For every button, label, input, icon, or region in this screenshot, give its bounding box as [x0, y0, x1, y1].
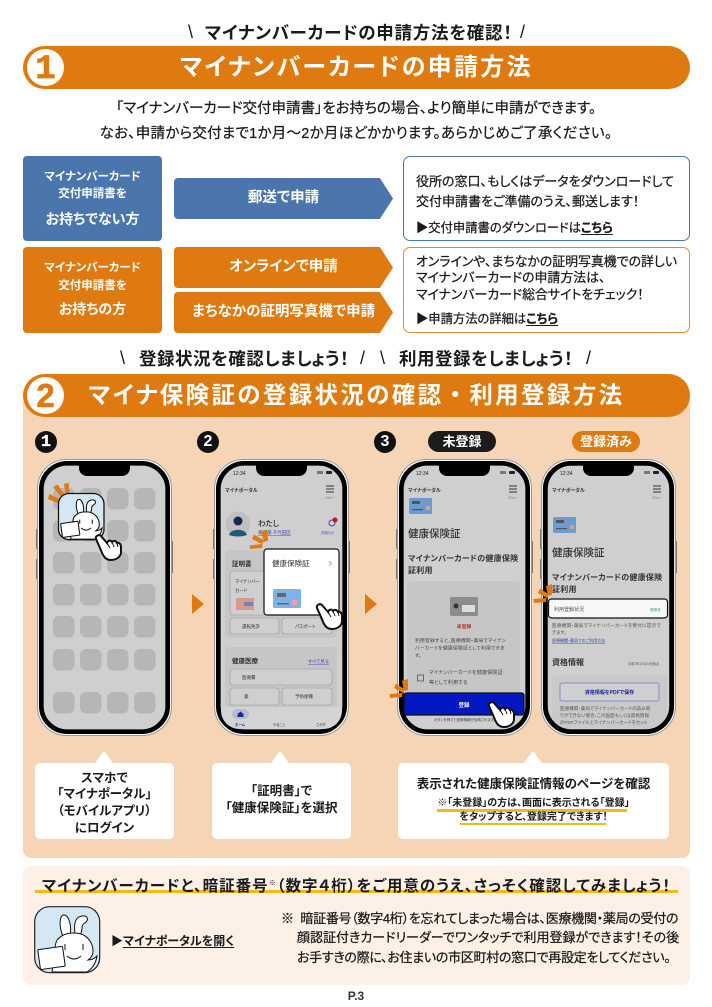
phone 4: registered screen: 令和7年10月24日時点 [628, 661, 660, 666]
box: online application details: ▶申請方法の詳細はこちら [416, 312, 558, 326]
registration status row: 登録済 [650, 607, 661, 612]
phone 3: not registered screen: マイナンバーカードの健康保険 [408, 553, 518, 563]
callout: step 3: 表示された健康保険証情報のページを確認 [417, 777, 650, 791]
step number 1 [35, 431, 57, 453]
box: mail application details: 役所の窓口、もしくはデータをダウンロードして [416, 174, 674, 188]
phone 2: portal home screen: 12:34 [233, 471, 246, 477]
phone 3: not registered screen: バーカードを健康保険証として利用できま [415, 644, 505, 652]
phone 4: registered screen [534, 459, 677, 736]
box: online application details: マイナンバーカードの申請方法は、 [416, 270, 605, 285]
phone 2: portal home screen: すべて見る [308, 658, 329, 665]
section 2 title bar [23, 374, 690, 417]
phone 4: registered screen: 証利用 [552, 584, 577, 594]
icon: pointing hand [489, 702, 514, 727]
phone 4: registered screen: のPDFファイルとマイナンバーカードをセット [560, 719, 648, 726]
box: no application form [23, 156, 162, 241]
phone 2: portal home screen: 医療費 [242, 674, 256, 681]
callout: step 2: 「健康保険証」を選択 [226, 800, 338, 814]
box: mail application details: ▶交付申請書のダウンロードはこちら [416, 220, 613, 234]
phone 4: registered screen: メニュー [652, 496, 662, 499]
tag: registered: 登録済み [580, 434, 632, 449]
phone 4: registered screen: 12:34 [560, 471, 573, 477]
callout: step 1: にログイン [75, 821, 134, 835]
intro text: 「マイナンバーカード交付申請書」をお持ちの場合、より簡単に申請ができます。 [116, 101, 596, 117]
number badge 1: 1 [35, 51, 56, 89]
icon: Myna portal rabbit app [34, 906, 100, 974]
arrow: apply online: オンラインで申請 [229, 259, 338, 275]
phone 3: not registered screen: 未登録 [457, 623, 471, 630]
heading: check and register [120, 348, 591, 369]
call to action heading: マイナンバーカードと、暗証番号※（数字４桁）をご用意のうえ、さっそく確認してみましょう！ [42, 878, 671, 895]
number badge 1 [27, 49, 64, 86]
heading: check and register: 利用登録をしましょう！ [399, 349, 573, 369]
callout: step 2: 「証明書」で [251, 784, 312, 798]
phone 3: not registered screen [390, 459, 533, 736]
phone 3: not registered screen: 等として利用する [429, 679, 468, 686]
box: online application details: マイナンバーカード総合サイトをチェック！ [416, 287, 644, 302]
heading: check application method: / [520, 22, 525, 42]
popup: health insurance card: 健康保険証 [272, 558, 310, 568]
phone 3: not registered screen: マイナンバーカードを健康保険証 [429, 669, 503, 676]
phone 2: portal home screen: 健康医療 [232, 656, 258, 665]
arrow: step 2 to 3 [365, 594, 377, 614]
note: forgotten PIN: お手すきの際に、お住まいの市区町村の窓口で再設定をしてください。 [297, 950, 671, 965]
note: forgotten PIN: ※ 暗証番号（数字4桁）を忘れてしまった場合は、医療機関・薬局の受付の [281, 910, 678, 926]
icon: pointing hand [96, 535, 121, 560]
note: forgotten PIN [281, 910, 679, 965]
callout: step 3: ※「未登録」の方は、画面に表示される「登録」 [437, 798, 630, 808]
phone 2: portal home screen: 予防接種 [295, 693, 313, 700]
box: mail application details: 交付申請書をご準備のうえ、郵送します！ [416, 194, 639, 208]
underline bar [35, 890, 678, 893]
step number 3 [374, 431, 396, 453]
icon: orange burst [250, 530, 268, 549]
phone 2: portal home screen: 薬 [244, 693, 249, 700]
phone 4: registered screen: きます。 [552, 629, 567, 636]
phone 2: portal home screen: お知らせ [321, 530, 335, 535]
box: online application details [403, 247, 690, 333]
phone 2: portal home screen: ホーム [235, 722, 246, 727]
box: no application form: お持ちでない方 [46, 210, 139, 226]
note: forgotten PIN: 顔認証付きカードリーダーでワンタッチで利用登録ができます！その後 [297, 930, 679, 945]
phone 4: registered screen: 資格情報 [552, 657, 584, 667]
icon: pointing hand [317, 604, 342, 629]
link: open Myna portal: ▶マイナポータルを開く [111, 934, 234, 948]
arrow: apply by mail: 郵送で申請 [248, 190, 319, 206]
phone 3: not registered screen: ボタンを押すと登録情報が反映されます [434, 717, 495, 722]
section 2 title text: マイナ保険証の登録状況の確認・利用登録方法 [89, 382, 624, 408]
heading: check and register: \ [380, 348, 385, 368]
number badge 2: 2 [36, 377, 55, 414]
phone 2: portal home screen: 東京都 千代田区 [258, 529, 291, 536]
icon: Myna portal rabbit app [58, 493, 104, 540]
icon: orange burst [48, 483, 70, 504]
phone 3: not registered screen: 利用登録すると、医療機関・薬局でマイナン [415, 637, 506, 644]
phone 3: not registered screen: マイナポータル [408, 487, 441, 494]
callout: step 1 [35, 763, 174, 839]
phone 2: portal home screen [213, 459, 350, 736]
phone 4: registered screen: 医療機関・薬局でマイナンバーカードを受付に提示で [552, 622, 661, 629]
popup: health insurance card [264, 549, 339, 615]
phone 2: portal home screen: カード [235, 588, 247, 594]
phone 4: registered screen: マイナポータル [552, 487, 585, 494]
phone 1: home screen [36, 459, 173, 736]
phone 4: registered screen: 資格情報をPDFで保存 [585, 689, 634, 696]
registration status row: 利用登録状況 [554, 606, 584, 613]
phone 2: portal home screen: マイナポータル [225, 487, 258, 494]
panel: section 2 background [23, 395, 690, 858]
callout: step 2 [212, 763, 351, 839]
step number 2: 2 [204, 433, 212, 450]
phone 2: portal home screen: さがす [316, 722, 326, 727]
phone 4: registered screen: りができない場合、この画面もしくは資格情報 [560, 712, 650, 719]
heading: check and register: / [360, 348, 365, 368]
box: no application form: 交付申請書を [58, 188, 127, 200]
arrow: step 1 to 2 [192, 594, 204, 614]
callout: step 3: をタップすると、登録完了できます！ [459, 812, 608, 823]
phone 4: registered screen: 健康保険証 [552, 546, 605, 559]
box: mail application details [403, 156, 690, 241]
phone 2: portal home screen: やること [273, 722, 286, 727]
phone 2: portal home screen: 証明書 [232, 559, 252, 568]
phone 3: not registered screen: す。 [415, 653, 422, 659]
phone 2: portal home screen: メニュー [325, 496, 335, 499]
callout: step 1: スマホで [81, 771, 128, 785]
callout: step 1: 「マイナポータル」 [57, 787, 152, 801]
box: has application form [23, 247, 162, 333]
intro text: なお、申請から交付まで1か月～2か月ほどかかります。あらかじめご了承ください。 [100, 126, 612, 142]
heading: check and register: 登録状況を確認しましょう！ [139, 349, 349, 369]
arrow: apply at photo booth: まちなかの証明写真機で申請 [192, 304, 375, 320]
number badge 2 [27, 377, 64, 414]
tag: not registered: 未登録 [442, 434, 482, 449]
phone 2: portal home screen: 運転免許 [242, 623, 260, 630]
step number 1: 1 [41, 433, 51, 452]
arrow: apply by mail [174, 178, 393, 219]
icon: orange burst [534, 584, 552, 603]
phone 4: registered screen: 医療機関・薬局でマイナンバーカードの読み取 [560, 705, 651, 712]
icon: orange burst [390, 679, 408, 698]
section 1 title text: マイナンバーカードの申請方法 [180, 54, 533, 81]
heading: check application method: \ [188, 22, 193, 42]
box: has application form: お持ちの方 [59, 300, 126, 316]
phone 2: portal home screen: パスポート [295, 623, 316, 629]
phone 4: registered screen: 医療機関・薬局でのご利用方法 [552, 637, 605, 643]
heading: check and register: \ [120, 348, 125, 368]
registration status row [548, 599, 668, 618]
phone 3: not registered screen: メニュー [508, 496, 518, 499]
phone 3: not registered screen: 健康保険証 [408, 527, 461, 540]
phone 2: portal home screen: わたし [258, 519, 279, 528]
heading: check application method: マイナンバーカードの申請方法を確認！ [205, 23, 513, 43]
tag: registered [572, 431, 640, 452]
arrow: apply at photo booth [174, 292, 393, 333]
step number 3: 3 [381, 433, 389, 450]
tag: not registered [428, 431, 496, 452]
arrow: apply online [174, 247, 393, 288]
callout: step 3 [398, 763, 669, 839]
intro text [100, 100, 612, 142]
phone 3: not registered screen: 証利用 [408, 565, 433, 575]
box: has application form: マイナンバーカード [44, 262, 141, 274]
box: no application form: マイナンバーカード [44, 170, 141, 182]
callout: step 1: （モバイルアプリ） [57, 804, 152, 818]
heading: check and register: / [586, 348, 591, 368]
phone 3: not registered screen: 12:34 [416, 471, 429, 477]
phone 2: portal home screen: マイナンバー [235, 579, 260, 585]
section 1 title bar [23, 46, 690, 89]
button: register [404, 693, 524, 715]
box: online application details: オンラインや、まちなかの証明写真機での詳しい [416, 254, 677, 268]
panel: bottom call to action [23, 866, 690, 985]
step number 2 [197, 431, 219, 453]
box: has application form: 交付申請書を [58, 280, 127, 292]
page number: P.3 [348, 989, 364, 1003]
button: register: 登録 [458, 701, 470, 709]
phone 4: registered screen: マイナンバーカードの健康保険 [552, 572, 662, 582]
